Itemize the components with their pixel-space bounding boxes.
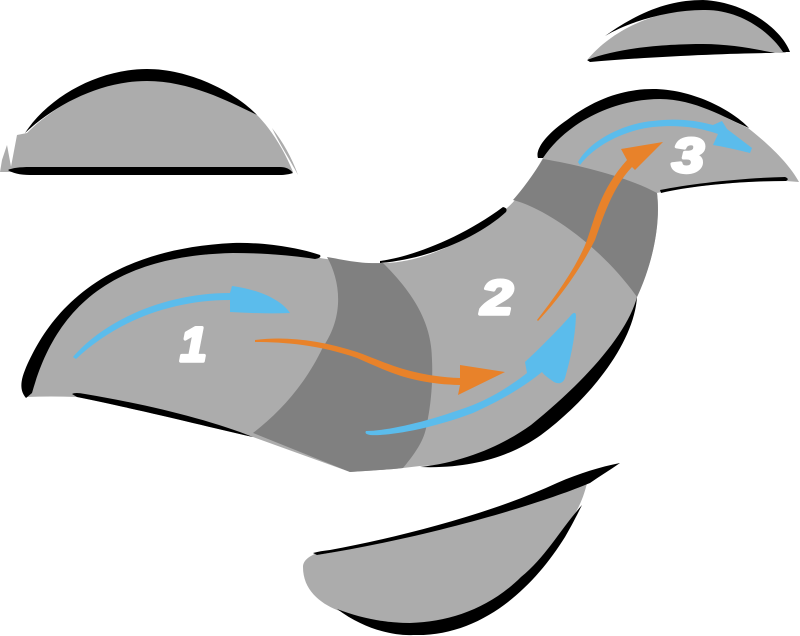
outline stroke: lower beak [660,177,788,193]
top-left cap shape [0,69,298,175]
blue arrow: lower flow 2 [366,313,576,435]
outline stroke: head top [537,89,749,158]
orange arrow: mid flow 1 [255,338,505,395]
top-right cap shape [587,0,790,62]
dark band: neck [513,159,658,297]
blue arrow: upper surface flow 1 [73,286,290,359]
dark band: mid body [253,257,432,472]
body fill [27,98,799,472]
outline stroke: back [21,243,320,398]
main body [21,89,799,472]
label: 1: 1 [180,319,207,372]
outline stroke: neck [380,207,507,263]
blue arrow: upper flow 3 [578,120,752,165]
bottom wing shape [303,463,620,635]
label: 3: 3 [672,129,704,183]
outline stroke: tail underside [72,393,253,437]
orange arrow: rising flow 2 [537,142,663,321]
outline stroke: belly [420,297,637,467]
label: 2: 2 [480,271,513,325]
